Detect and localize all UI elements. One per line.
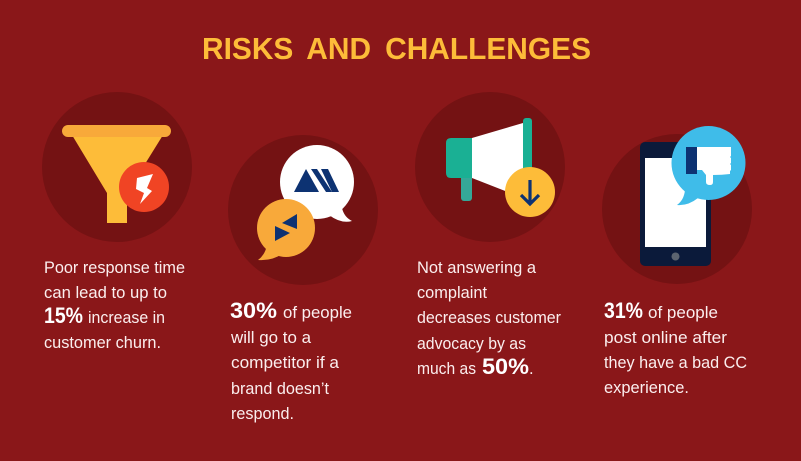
icon: megaphone xyxy=(446,118,532,201)
icon: down arrow badge xyxy=(505,167,555,217)
text: post online statistic: 31% xyxy=(604,298,643,323)
text: advocacy statistic: decreases customer xyxy=(417,309,561,327)
text: post online statistic: of people xyxy=(648,304,718,322)
icon: orange speech bubble xyxy=(257,199,315,260)
panel: megaphone xyxy=(415,92,565,379)
text: advocacy statistic: complaint xyxy=(417,284,487,302)
text: competitor statistic: of people xyxy=(283,304,352,322)
icon: smartphone xyxy=(640,142,711,266)
text: churn statistic: can lead to up to xyxy=(44,284,167,302)
text: churn statistic: 15% xyxy=(44,303,83,328)
icon: chat backdrop circle xyxy=(228,135,378,285)
text: advocacy statistic: . xyxy=(529,360,534,378)
text: advocacy statistic: 50% xyxy=(482,354,529,379)
icon: thumbs down bubble xyxy=(672,126,746,205)
text: churn statistic: Poor response time xyxy=(44,259,185,277)
text: competitor statistic: brand doesn’t xyxy=(231,380,329,398)
panel: phone xyxy=(602,126,752,397)
panel: chat bubbles xyxy=(228,135,378,423)
icon: funnel backdrop circle xyxy=(42,92,192,242)
icon: phone backdrop circle xyxy=(602,134,752,284)
text: competitor statistic: 30% xyxy=(230,298,277,323)
text: advocacy statistic: Not answering a xyxy=(417,259,537,277)
text: competitor statistic: will go to a xyxy=(230,329,312,347)
text: post online statistic: post online after xyxy=(604,329,728,347)
title: RISKS AND CHALLENGES xyxy=(202,31,591,66)
text: competitor statistic: respond. xyxy=(231,405,294,423)
text: post online statistic: they have a bad CC xyxy=(604,354,747,372)
text: post online statistic xyxy=(604,298,747,397)
icon: funnel xyxy=(62,125,171,223)
text: churn statistic: customer churn. xyxy=(44,334,161,352)
text: competitor statistic: competitor if a xyxy=(231,354,340,372)
text: advocacy statistic xyxy=(417,259,561,379)
text: advocacy statistic: advocacy by as xyxy=(417,335,526,353)
text: competitor statistic xyxy=(230,298,352,423)
icon: lightning badge xyxy=(119,162,169,212)
text: advocacy statistic: much as xyxy=(417,360,476,378)
icon: megaphone backdrop circle xyxy=(415,92,565,242)
panel: funnel xyxy=(42,92,192,352)
text: churn statistic xyxy=(44,259,185,352)
text: churn statistic: increase in xyxy=(88,309,165,327)
icon: white speech bubble xyxy=(280,145,354,222)
text: post online statistic: experience. xyxy=(604,379,689,397)
